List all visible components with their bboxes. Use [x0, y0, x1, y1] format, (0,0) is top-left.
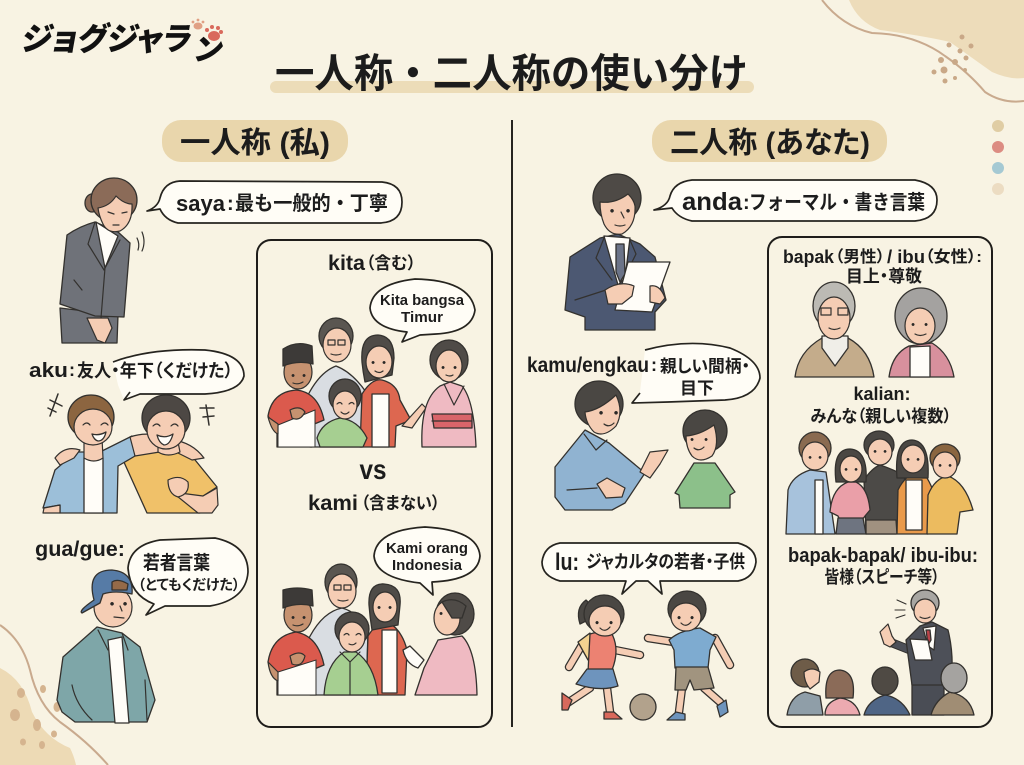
- logo: ン: [192, 34, 225, 67]
- label and bubble: kamu/engkau: kamu/engkau: [527, 354, 649, 377]
- label: kita: （含む）: [366, 254, 416, 273]
- speech bubble: Kita bangsa Timur: Kita bangsa: [380, 292, 465, 309]
- heading: second person: 二人称 (あなた): [670, 127, 870, 160]
- speech bubble: saya: 最も一般的・丁寧: [235, 192, 388, 215]
- group: kami people: [268, 564, 477, 695]
- speech bubble: anda: [654, 180, 937, 221]
- label and bubble: kamu/engkau: :: [651, 355, 657, 375]
- label: kalian: [810, 384, 952, 426]
- logo: ジョグジャラ: [19, 21, 195, 57]
- label: bapak-bapak / ibu-ibu: bapak-bapak/ ibu-ibu:: [788, 545, 978, 567]
- speech bubble: Kami orang Indonesia: Kami orang: [386, 540, 468, 557]
- speech bubble: Kita bangsa Timur: [370, 279, 475, 342]
- speech bubble: anda: anda: [682, 188, 743, 216]
- label and bubble: aku: 友人・年下（くだけた）: [77, 360, 233, 381]
- label: kalian: kalian:: [854, 384, 910, 404]
- label and bubble: kamu/engkau: 目下: [680, 379, 714, 398]
- label: bapak-bapak / ibu-ibu: [788, 545, 978, 587]
- group: kalian people: [786, 431, 973, 534]
- heading: first person: 一人称 (私): [180, 127, 330, 160]
- label: gua/gue: gua/gue:: [35, 538, 125, 561]
- divider: [511, 120, 513, 727]
- label: bapak-bapak / ibu-ibu: 皆様（スピーチ等）: [824, 567, 940, 587]
- label: kami: [308, 492, 440, 515]
- speech bubble: lu: ジャカルタの若者・子供: [586, 552, 745, 572]
- speech bubble: Kita bangsa Timur: Timur: [401, 309, 443, 326]
- speech bubble: lu: lu:: [555, 549, 579, 576]
- figure: young man with cap: [57, 570, 155, 723]
- decoration: colour dots: [992, 120, 1004, 195]
- figure: two friends: [43, 394, 218, 513]
- speech bubble: saya: [147, 181, 402, 223]
- label: bapak / ibu: bapak: [783, 247, 835, 267]
- panel: respectful and plural forms: [768, 237, 992, 727]
- label: bapak / ibu: / ibu: [887, 247, 925, 267]
- speech bubble: gua/gue: 若者言葉: [143, 552, 210, 574]
- heading: second person: [652, 120, 887, 162]
- label and bubble: aku: aku: [29, 360, 68, 382]
- label: vs: vs: [360, 454, 386, 485]
- label and bubble: kamu/engkau: [527, 343, 760, 403]
- decoration: top right blob: [822, 0, 1024, 102]
- label: bapak / ibu: （女性）:: [925, 247, 982, 266]
- label: bapak / ibu: （男性）: [835, 247, 885, 266]
- label: kami: （含まない）: [361, 494, 440, 513]
- panel: first person plural: [257, 240, 492, 727]
- figure: children playing with ball: [562, 591, 730, 720]
- speech bubble: saya: saya: [176, 191, 226, 216]
- speech bubble: gua/gue: [128, 538, 248, 615]
- decoration: bottom left blob: [0, 625, 108, 765]
- figure: man talking to child: [555, 381, 735, 510]
- label and bubble: kamu/engkau: 親しい間柄・: [660, 357, 750, 376]
- figure: elderly woman: [889, 288, 954, 377]
- label: bapak / ibu: [783, 247, 982, 286]
- figure: elderly man: [795, 282, 874, 377]
- speech bubble: Kami orang Indonesia: [374, 527, 480, 595]
- heading: first person: [162, 120, 348, 162]
- speech bubble: anda: :: [743, 192, 750, 214]
- logo: [17, 19, 228, 67]
- figure: speaker: [880, 590, 952, 715]
- label: kita: kita: [328, 252, 365, 275]
- group: kita people: [268, 318, 476, 447]
- figure: man in suit with paper: [565, 174, 670, 330]
- speech bubble: saya: :: [227, 193, 234, 215]
- label and bubble: aku: [29, 350, 244, 400]
- speech bubble: lu: [542, 543, 756, 594]
- speech bubble: Kami orang Indonesia: Indonesia: [392, 557, 463, 574]
- figure: audience: [787, 659, 974, 715]
- label: kita: [328, 252, 416, 275]
- title: 一人称・二人称の使い分け: [275, 52, 748, 96]
- label and bubble: aku: :: [69, 360, 75, 380]
- speech bubble: gua/gue: （とてもくだけた）: [138, 577, 240, 594]
- label: bapak / ibu: 目上・尊敬: [846, 266, 922, 286]
- label: kalian: みんな（親しい複数）: [810, 406, 952, 426]
- figure: bowing woman: [60, 178, 144, 343]
- speech bubble: anda: フォーマル・書き言葉: [749, 191, 925, 214]
- label: kami: kami: [308, 492, 358, 515]
